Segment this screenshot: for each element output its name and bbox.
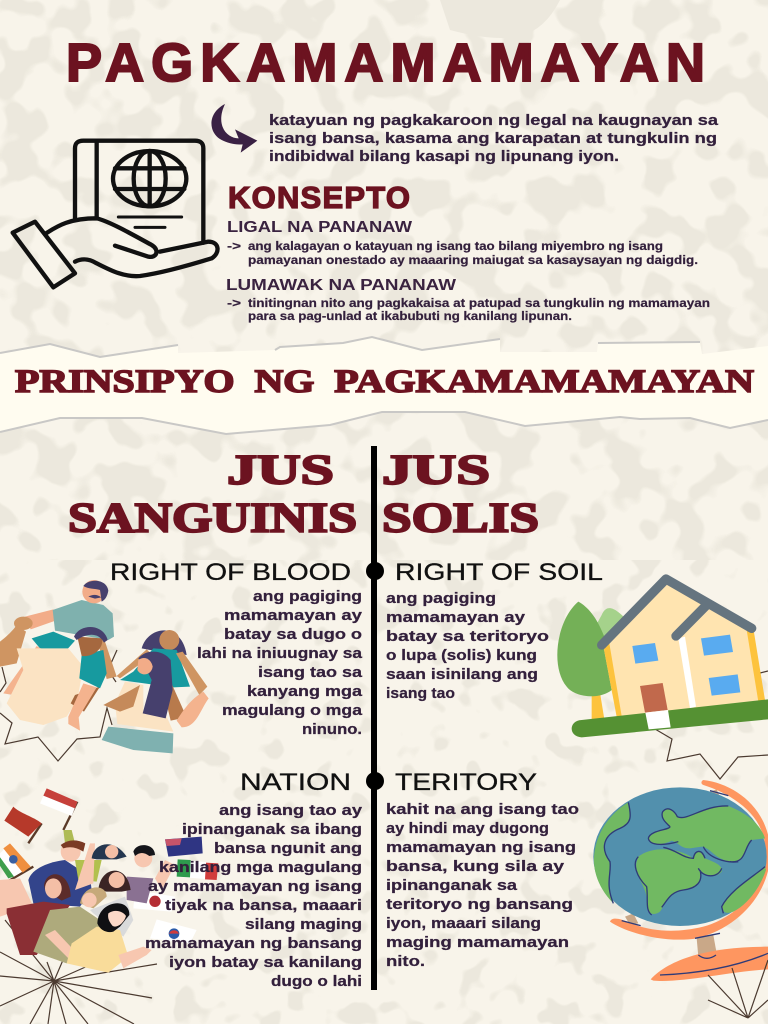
definition text: indibidwal bilang kasapi ng lipunang iyon. bbox=[269, 148, 619, 165]
nation text: ang isang tao ay bbox=[219, 802, 363, 819]
icon: family illustration bbox=[0, 580, 209, 753]
right of blood text: kanyang mga bbox=[247, 683, 363, 700]
subheading: right of blood: RIGHT OF BLOOD bbox=[110, 559, 351, 586]
nation text bbox=[145, 802, 363, 990]
nation text: tiyak na bansa, maaari bbox=[165, 897, 362, 914]
right of blood text: magulang o mga bbox=[222, 702, 363, 719]
icon: jagged outline right bbox=[655, 671, 768, 779]
definition text: isang bansa, kasama ang karapatan at tungkulin ng bbox=[269, 130, 717, 147]
heading: jus sanguinis: JUS bbox=[227, 448, 334, 494]
heading: konsepto: KONSEPTO bbox=[228, 180, 410, 215]
heading: jus sanguinis: SANGUINIS bbox=[68, 496, 357, 542]
torn paper band bbox=[0, 337, 768, 434]
teritory text: ay hindi may dugong bbox=[386, 820, 549, 837]
ligal na pananaw: -> bbox=[227, 241, 241, 253]
right of soil text: isang tao bbox=[386, 685, 455, 702]
icon: diverse people with flags bbox=[0, 788, 218, 973]
heading: jus solis: SOLIS bbox=[382, 496, 539, 542]
right of soil text: mamamayan ay bbox=[386, 609, 526, 626]
teritory text: kahit na ang isang tao bbox=[386, 801, 579, 818]
lumawak na pananaw: LUMAWAK NA PANANAW bbox=[226, 277, 456, 294]
teritory text: nito. bbox=[386, 953, 425, 970]
nation text: bansa ngunit ang bbox=[214, 840, 362, 857]
heading: jus solis bbox=[382, 448, 539, 542]
nation text: ipinanganak sa ibang bbox=[182, 821, 362, 838]
ligal na pananaw bbox=[227, 219, 698, 267]
nation text: mamamayan ng bansang bbox=[145, 935, 362, 952]
right of blood text: ninuno. bbox=[302, 721, 362, 738]
nation text: iyon batay sa kanilang bbox=[169, 954, 362, 971]
lumawak na pananaw bbox=[226, 277, 710, 323]
right of soil text: saan isinilang ang bbox=[386, 666, 538, 683]
right of blood text: mamamayan ay bbox=[224, 607, 363, 624]
right of soil text bbox=[386, 590, 549, 702]
definition text: katayuan ng pagkakaroon ng legal na kaugnayan sa bbox=[269, 112, 719, 129]
icon: hand holding passport bbox=[13, 141, 218, 287]
lumawak na pananaw: -> bbox=[227, 298, 241, 310]
icon: jagged outline left bbox=[0, 650, 117, 761]
subheading: right of soil: RIGHT OF SOIL bbox=[395, 559, 603, 586]
teritory text: bansa, kung sila ay bbox=[386, 858, 565, 875]
right of soil text: o lupa (solis) kung bbox=[386, 647, 537, 664]
nation text: silang maging bbox=[245, 916, 362, 933]
teritory text bbox=[386, 801, 579, 970]
right of blood text: batay sa dugo o bbox=[224, 626, 362, 643]
right of blood text bbox=[197, 588, 363, 738]
ligal na pananaw: LIGAL NA PANANAW bbox=[227, 219, 412, 236]
icon: house bbox=[557, 579, 768, 737]
icon: jagged burst lower right bbox=[708, 960, 768, 1018]
icon: curved arrow bbox=[211, 104, 257, 153]
subheading: nation: NATION bbox=[240, 769, 351, 796]
right of soil text: ang pagiging bbox=[386, 590, 496, 607]
heading: jus sanguinis bbox=[68, 448, 357, 542]
right of blood text: isang tao sa bbox=[258, 664, 363, 681]
teritory text: ipinanganak sa bbox=[386, 877, 518, 894]
teritory text: mamamayan ng isang bbox=[386, 839, 576, 856]
center timeline bbox=[366, 446, 384, 990]
heading: jus solis: JUS bbox=[382, 448, 490, 494]
definition text bbox=[269, 112, 719, 165]
right of blood text: lahi na iniuugnay sa bbox=[197, 645, 363, 662]
heading: prinsipyo: PRINSIPYO NG PAGKAMAMAMAYAN bbox=[15, 364, 754, 400]
ligal na pananaw: pamayanan onestado ay maaaring maiugat sa kasaysayan ng daigdig. bbox=[248, 255, 698, 267]
right of blood text: ang pagiging bbox=[253, 588, 362, 605]
teritory text: maging mamamayan bbox=[386, 934, 569, 951]
title: PAGKAMAMAMAYAN bbox=[66, 33, 705, 93]
icon: globe bbox=[593, 780, 768, 981]
teritory text: iyon, maaari silang bbox=[386, 915, 541, 932]
teritory text: teritoryo ng bansang bbox=[386, 896, 573, 913]
lumawak na pananaw: para sa pag-unlad at ikabubuti ng kanilang lipunan. bbox=[248, 311, 572, 323]
subheading: teritory: TERITORY bbox=[395, 769, 537, 796]
ligal na pananaw: ang kalagayan o katayuan ng isang tao bilang miyembro ng isang bbox=[248, 241, 663, 253]
nation text: ay mamamayan ng isang bbox=[148, 878, 362, 895]
icon: jagged burst lower left bbox=[0, 920, 157, 1024]
nation text: kanilang mga magulang bbox=[159, 859, 362, 876]
nation text: dugo o lahi bbox=[271, 973, 362, 990]
lumawak na pananaw: tinitingnan nito ang pagkakaisa at patupad sa tungkulin ng mamamayan bbox=[248, 298, 710, 310]
right of soil text: batay sa teritoryo bbox=[386, 628, 549, 645]
